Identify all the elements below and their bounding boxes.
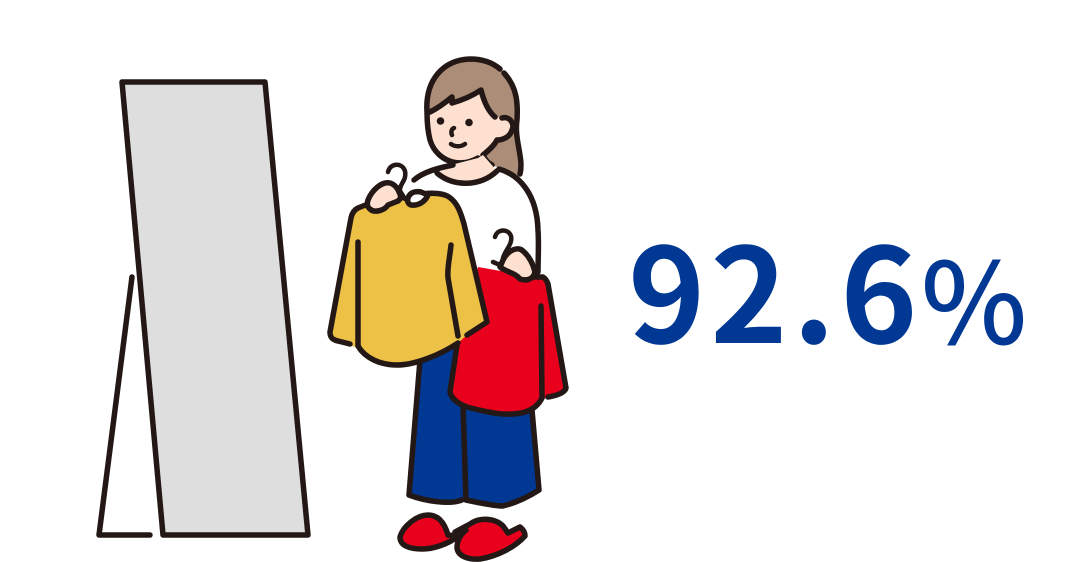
percent sign: % xyxy=(921,213,1027,377)
red garment xyxy=(450,267,567,414)
illustration: woman holding clothes xyxy=(329,59,567,559)
hanger on red garment xyxy=(493,230,511,268)
icon: standing mirror xyxy=(99,82,308,535)
statistic: 92.6%: 92.6 xyxy=(628,191,922,381)
hanger on yellow garment xyxy=(388,165,405,199)
eyes, nose and mouth xyxy=(437,117,473,146)
slippers xyxy=(400,515,525,559)
shirt and neck xyxy=(414,165,538,272)
face xyxy=(429,90,513,163)
pants xyxy=(409,330,539,506)
left hand and collar xyxy=(367,183,428,211)
hair back xyxy=(427,59,520,176)
hair and face outline xyxy=(427,59,500,163)
right hand xyxy=(500,249,535,280)
yellow garment xyxy=(329,193,487,365)
